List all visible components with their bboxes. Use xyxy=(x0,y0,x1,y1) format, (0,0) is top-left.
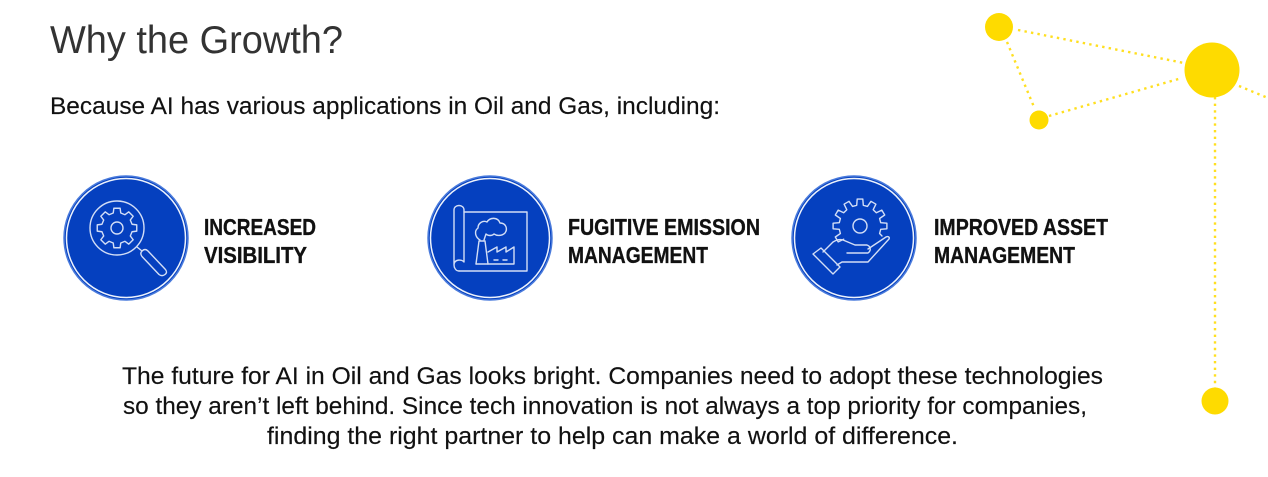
icon: blueprint with factory xyxy=(428,176,552,300)
title: Why the Growth? xyxy=(50,19,343,62)
closing paragraph: The future for AI in Oil and Gas looks bright. Companies need to adopt these technologies xyxy=(122,363,1103,390)
label: INCREASED xyxy=(204,214,316,240)
item: improved asset management: MANAGEMENT xyxy=(934,242,1076,268)
icon: gear under magnifying glass xyxy=(64,176,188,300)
closing paragraph xyxy=(122,363,1103,450)
item: fugitive emission management: MANAGEMENT xyxy=(568,242,709,268)
label: IMPROVED ASSET xyxy=(934,214,1109,240)
label: FUGITIVE EMISSION xyxy=(568,214,760,240)
item: fugitive emission management xyxy=(428,176,760,300)
closing paragraph: so they aren’t left behind. Since tech innovation is not always a top priority for companies, xyxy=(123,393,1087,420)
decorative network of yellow nodes xyxy=(985,13,1268,414)
item: improved asset management xyxy=(792,176,1109,300)
item: increased visibility xyxy=(64,176,316,300)
icon: hand holding gear xyxy=(792,176,916,300)
item: increased visibility: VISIBILITY xyxy=(204,242,307,268)
intro text: Because AI has various applications in Oil and Gas, including: xyxy=(50,93,720,120)
closing paragraph: finding the right partner to help can make a world of difference. xyxy=(267,423,958,450)
